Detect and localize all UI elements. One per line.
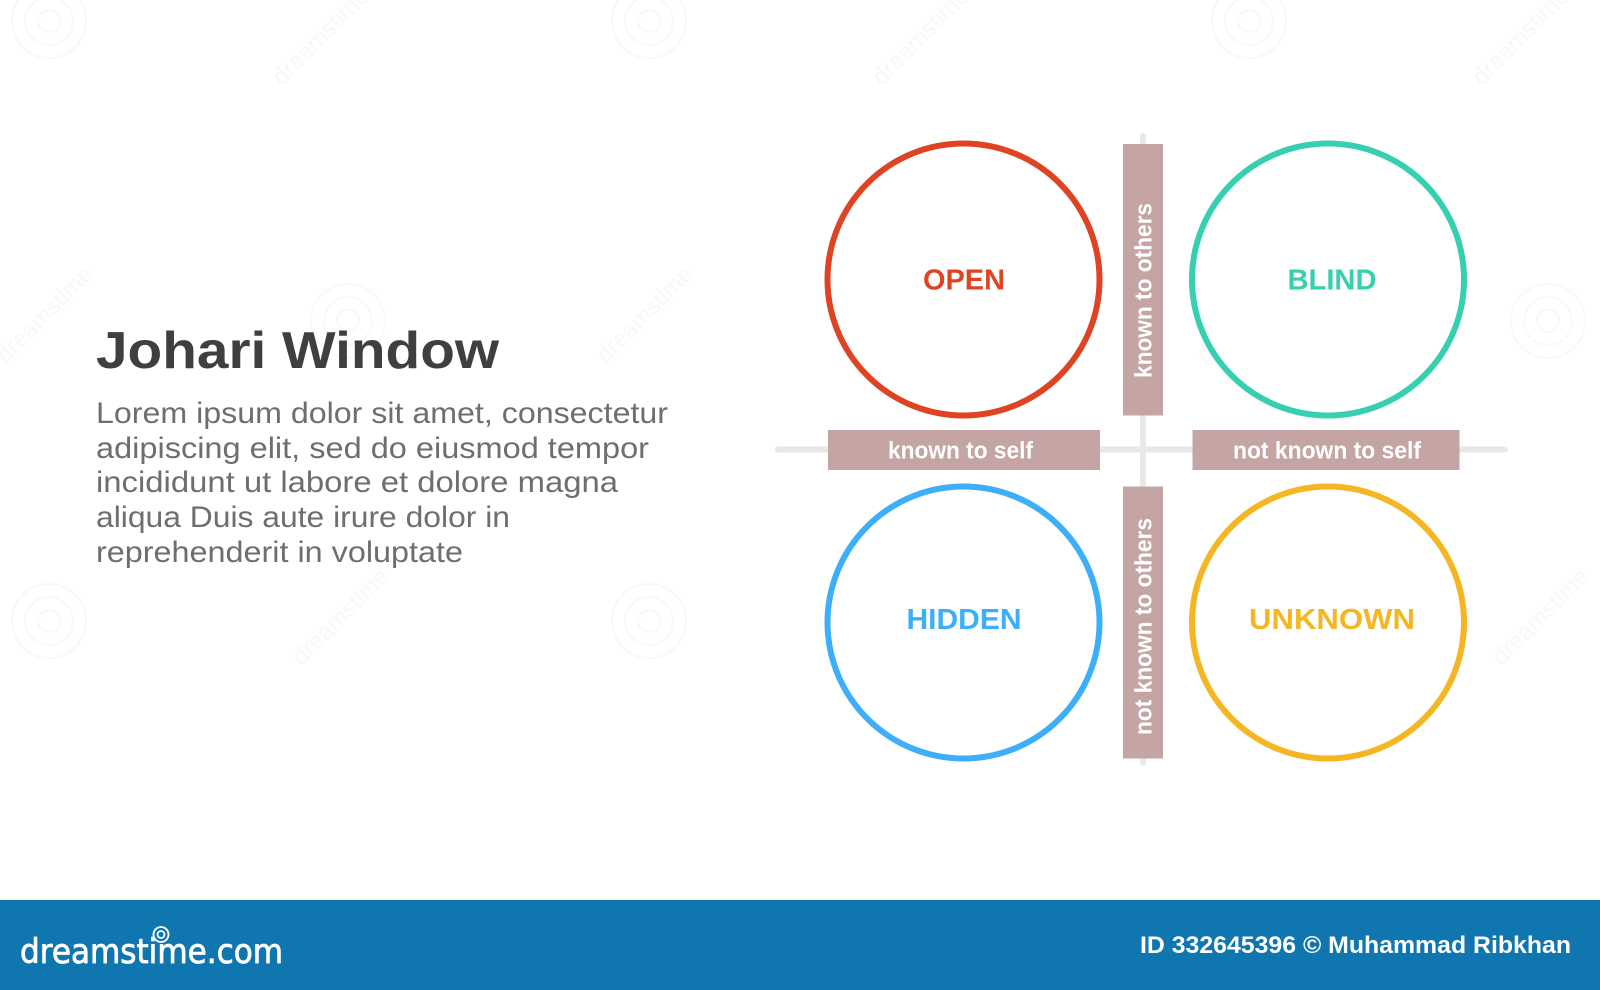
footer banner: [0, 900, 1600, 990]
circle: hidden: [828, 486, 1100, 758]
infographic canvas: dreamstime: [287, 563, 395, 671]
label bar: known to self: known to self: [888, 438, 1034, 464]
axis cross lines: [775, 133, 1508, 766]
infographic canvas: dreamstime: [887, 563, 995, 671]
body text block: adipiscing elit, sed do eiusmod tempor: [96, 432, 649, 465]
label bar: not known to others: [1123, 486, 1163, 758]
circle: open: [828, 144, 1100, 416]
body text block: Lorem ipsum dolor sit amet, consectetur: [96, 397, 668, 430]
circle: open: OPEN: [923, 264, 1005, 296]
body text block: incididunt ut labore et dolore magna: [96, 466, 618, 499]
label bar: known to others: known to others: [1130, 203, 1158, 378]
body text block: reprehenderit in voluptate: [96, 536, 463, 569]
brand wordmark: dreamstime.com: [20, 932, 283, 972]
circle: hidden: HIDDEN: [906, 604, 1022, 636]
label bar: known to others: [1123, 144, 1163, 416]
body text block: aliqua Duis aute irure dolor in: [96, 501, 510, 534]
label bar: known to self: [828, 430, 1100, 470]
circle: blind: [1192, 144, 1464, 416]
circle: blind: BLIND: [1288, 264, 1376, 296]
circle: unknown: [1192, 486, 1464, 758]
label bar: not known to self: [1192, 430, 1460, 470]
image id and credit: ID 332645396 © Muhammad Ribkhan: [1140, 932, 1571, 959]
body text block: [96, 397, 668, 569]
title: Johari Window: [96, 322, 500, 380]
infographic canvas: dreamstime: [591, 261, 699, 369]
icon: brand spiral: [154, 927, 168, 942]
circle: unknown: UNKNOWN: [1249, 604, 1415, 636]
label bar: not known to self: not known to self: [1233, 438, 1422, 464]
infographic canvas: dreamstime: [1487, 563, 1595, 671]
label bar: not known to others: not known to others: [1130, 518, 1158, 735]
infographic canvas: dreamstime: [1191, 261, 1299, 369]
